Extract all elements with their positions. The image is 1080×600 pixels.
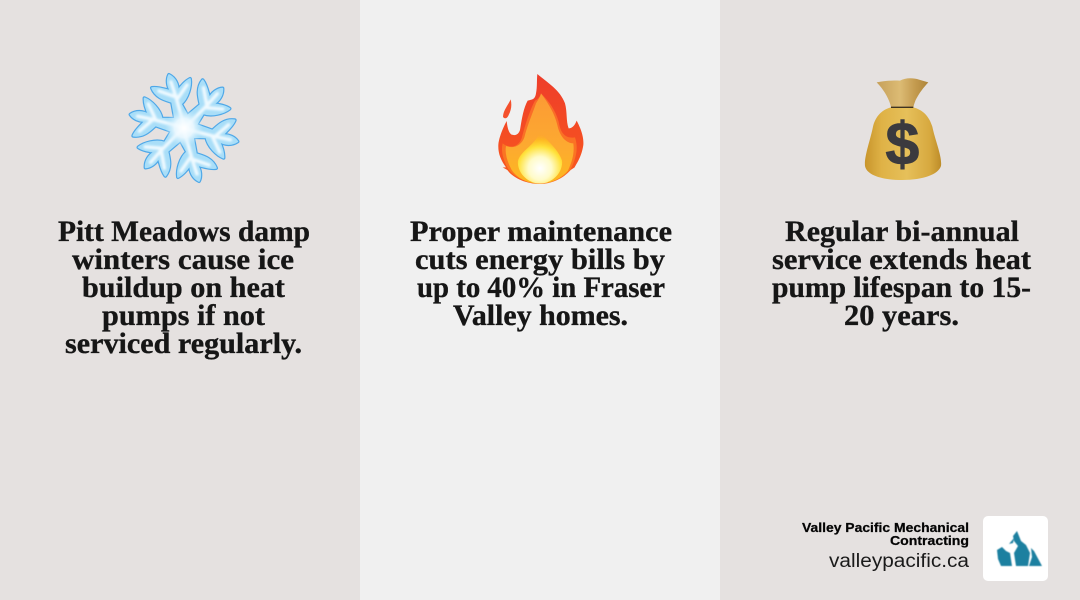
heading: center panel text: Proper maintenance	[410, 215, 672, 248]
heading: left panel text: Pitt Meadows damp	[58, 215, 310, 248]
icon: snowflake	[122, 74, 246, 182]
heading: center panel text	[410, 215, 672, 332]
brand url: valleypacific.ca	[829, 551, 969, 572]
brand name: Valley Pacific Mechanical	[802, 520, 969, 535]
dollar sign: $	[885, 109, 919, 177]
brand name: Contracting	[890, 533, 969, 548]
heading: left panel text: buildup on heat	[82, 271, 285, 304]
heading: right panel text: 20 years.	[844, 299, 959, 332]
bag tie	[891, 105, 913, 109]
heading: left panel text: winters cause ice	[72, 243, 294, 276]
heading: left panel text: serviced regularly.	[65, 327, 302, 360]
panel: right background	[720, 0, 1080, 600]
logo	[983, 516, 1048, 581]
heading: center panel text: cuts energy bills by	[415, 243, 665, 276]
heading: left panel text	[58, 215, 310, 360]
panel: center background	[360, 0, 720, 600]
icon: flame	[498, 74, 583, 184]
heading: center panel text: up to 40% in Fraser	[417, 271, 665, 304]
icon: mountains	[997, 531, 1042, 566]
bag neck	[877, 78, 928, 107]
icon: money bag	[865, 78, 941, 180]
heading: left panel text: pumps if not	[102, 299, 265, 332]
heading: right panel text: Regular bi-annual	[785, 215, 1019, 248]
panel: left background	[0, 0, 360, 600]
heading: right panel text: pump lifespan to 15-	[772, 271, 1031, 304]
heading: center panel text: Valley homes.	[453, 299, 628, 332]
brand name	[802, 520, 969, 548]
bag body	[865, 107, 941, 180]
heading: right panel text: service extends heat	[772, 243, 1031, 276]
heading: right panel text	[772, 215, 1031, 332]
